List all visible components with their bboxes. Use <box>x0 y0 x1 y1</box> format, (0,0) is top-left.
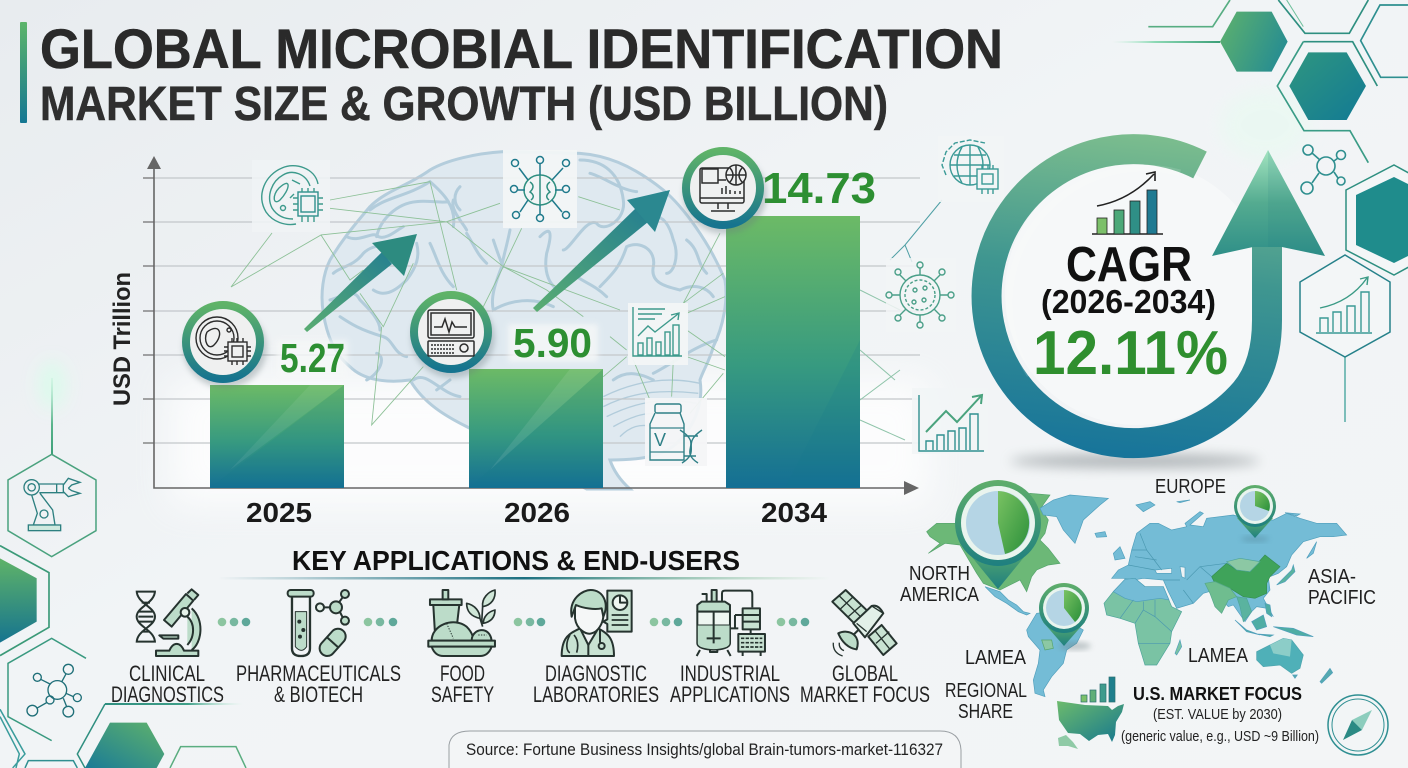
chart grid lines <box>143 178 920 443</box>
label: food safety: SAFETY <box>431 682 494 707</box>
growth ring and arrow <box>987 149 1325 443</box>
USA map <box>1057 701 1124 749</box>
label: industrial applications <box>670 661 790 707</box>
CAGR value: 12.11% <box>1033 319 1228 388</box>
label: pharmaceuticals <box>236 661 401 707</box>
value 2034: 14.73 <box>762 164 876 213</box>
region labels <box>900 476 1376 723</box>
year 2026: 2026 <box>504 497 570 528</box>
value labels <box>280 164 876 381</box>
central america <box>985 587 1030 615</box>
section heading: KEY APPLICATIONS & END-USERS <box>292 545 740 576</box>
icon: vitamin bottle dna: V <box>654 430 666 450</box>
label: global market focus <box>800 661 930 707</box>
badge 2026: monitor <box>411 295 495 378</box>
estimate label: (EST. VALUE by 2030) <box>1153 706 1282 723</box>
bar 2026 <box>469 369 603 488</box>
label: global market focus: MARKET FOCUS <box>800 682 930 707</box>
icon: bar chart <box>1092 172 1163 234</box>
title line 2: MARKET SIZE & GROWTH (USD BILLION) <box>40 78 888 131</box>
value 2026: 5.90 <box>513 320 592 366</box>
hexagon chart <box>1300 255 1390 422</box>
islands <box>1277 565 1295 585</box>
growth arrow 1 <box>304 234 417 332</box>
label: north america <box>900 563 980 606</box>
icon: compass <box>1328 695 1388 755</box>
label: north america: AMERICA <box>900 584 980 606</box>
year labels <box>246 497 827 528</box>
label: clinical diagnostics: CLINICAL <box>129 661 205 686</box>
network lines <box>231 182 725 425</box>
icon: mini bars <box>1081 677 1115 702</box>
eurasia <box>1112 512 1347 622</box>
label: global market focus: GLOBAL <box>832 661 898 686</box>
madagascar and new zealand <box>1175 640 1182 655</box>
icon: virus <box>886 258 956 332</box>
label: industrial applications: INDUSTRIAL <box>680 661 780 686</box>
label: lamea left: LAMEA <box>965 647 1027 669</box>
pin: north america <box>955 480 1041 589</box>
label: pharmaceuticals: & BIOTECH <box>274 682 363 707</box>
source box <box>449 731 961 768</box>
south america <box>1027 612 1083 697</box>
label: pharmaceuticals: PHARMACEUTICALS <box>236 661 401 686</box>
pin: lamea <box>1039 583 1091 650</box>
title block <box>20 17 1003 131</box>
panel: CAGR <box>987 149 1325 468</box>
connector dots <box>218 618 809 626</box>
australia <box>1257 638 1303 673</box>
greenland <box>1040 495 1108 543</box>
label: diagnostic laboratories: DIAGNOSTIC <box>545 661 647 686</box>
china <box>1212 555 1280 598</box>
black sea <box>1155 568 1172 573</box>
icon: brain network <box>503 150 577 228</box>
hexagon robot arm icon <box>8 454 96 557</box>
landmasses east <box>1104 500 1347 683</box>
icon: doctor <box>562 590 632 656</box>
icon: vitamin bottle dna <box>645 398 707 466</box>
y axis label: USD Trillion <box>109 272 136 406</box>
heading: U.S. MARKET FOCUS <box>1133 684 1302 704</box>
caspian <box>1180 567 1185 578</box>
label: asia pacific <box>1308 566 1376 609</box>
label: asia pacific: ASIA- <box>1308 566 1356 588</box>
application labels <box>111 661 930 707</box>
brain illustration <box>322 152 726 489</box>
decoration: left hexagons <box>0 361 246 768</box>
label: regional share: SHARE <box>958 701 1013 723</box>
icon: line chart <box>912 388 988 454</box>
small island <box>1095 532 1107 537</box>
value patches <box>276 324 598 378</box>
badge 2025: petri dish chip <box>183 305 267 388</box>
hexagon molecule icon <box>27 664 81 717</box>
value 2025: 5.27 <box>280 335 345 381</box>
borders <box>1120 533 1227 643</box>
icon: satellite <box>832 590 897 656</box>
panel: world map <box>900 476 1388 755</box>
label: clinical diagnostics: DIAGNOSTICS <box>111 682 224 707</box>
source text: Source: Fortune Business Insights/global Brain-tumors-market-116327 <box>466 740 943 759</box>
label: diagnostic laboratories: LABORATORIES <box>533 682 659 707</box>
pin: asia pacific <box>1234 485 1276 542</box>
india <box>1205 582 1237 613</box>
icon: report chart <box>628 303 688 365</box>
north america <box>927 493 1060 592</box>
label: north america: NORTH <box>909 563 970 585</box>
icon: food bowl <box>428 590 495 656</box>
right network lines <box>860 200 942 440</box>
label: lamea right: LAMEA <box>1188 645 1249 667</box>
label: regional share: REGIONAL <box>945 680 1027 702</box>
bar 2034 <box>726 216 860 488</box>
ring shadow <box>1010 454 1260 468</box>
badge 2034: monitor globe <box>683 151 767 234</box>
bar 2025 <box>210 385 344 488</box>
title line 1: GLOBAL MICROBIAL IDENTIFICATION <box>40 17 1003 80</box>
landmasses west <box>927 493 1108 697</box>
growth arrow 2 <box>533 190 670 312</box>
decoration: top right hexagons <box>1112 0 1408 163</box>
icon: microbe chip <box>252 160 330 232</box>
year 2034: 2034 <box>761 497 827 528</box>
CAGR period: (2026-2034) <box>1041 283 1216 320</box>
label: industrial applications: APPLICATIONS <box>670 682 790 707</box>
icon: DNA and microscope <box>137 589 200 656</box>
southeast asia <box>1237 597 1252 622</box>
africa <box>1104 578 1182 665</box>
CAGR label: CAGR <box>1066 238 1192 292</box>
chart axes <box>147 156 919 495</box>
icon: industrial reactor <box>697 590 765 656</box>
north africa <box>1113 578 1169 602</box>
label: europe: EUROPE <box>1155 476 1226 498</box>
icon: globe chip <box>938 136 1004 202</box>
title accent bar <box>20 22 27 123</box>
generic value: (generic value, e.g., USD ~9 Billion) <box>1121 728 1319 745</box>
US market focus block <box>1057 677 1319 749</box>
icon: test tube and molecule <box>288 590 349 659</box>
hexagon right <box>1346 165 1408 275</box>
mongolia <box>1227 558 1260 572</box>
label: clinical diagnostics <box>111 661 224 707</box>
label: food safety: FOOD <box>440 661 485 686</box>
label: food safety <box>431 661 494 707</box>
molecule icon <box>1301 145 1346 194</box>
label: asia pacific: PACIFIC <box>1308 587 1376 609</box>
year 2025: 2025 <box>246 497 312 528</box>
label: regional share <box>945 680 1027 723</box>
label: diagnostic laboratories <box>533 661 659 707</box>
panel: key applications <box>111 545 930 707</box>
